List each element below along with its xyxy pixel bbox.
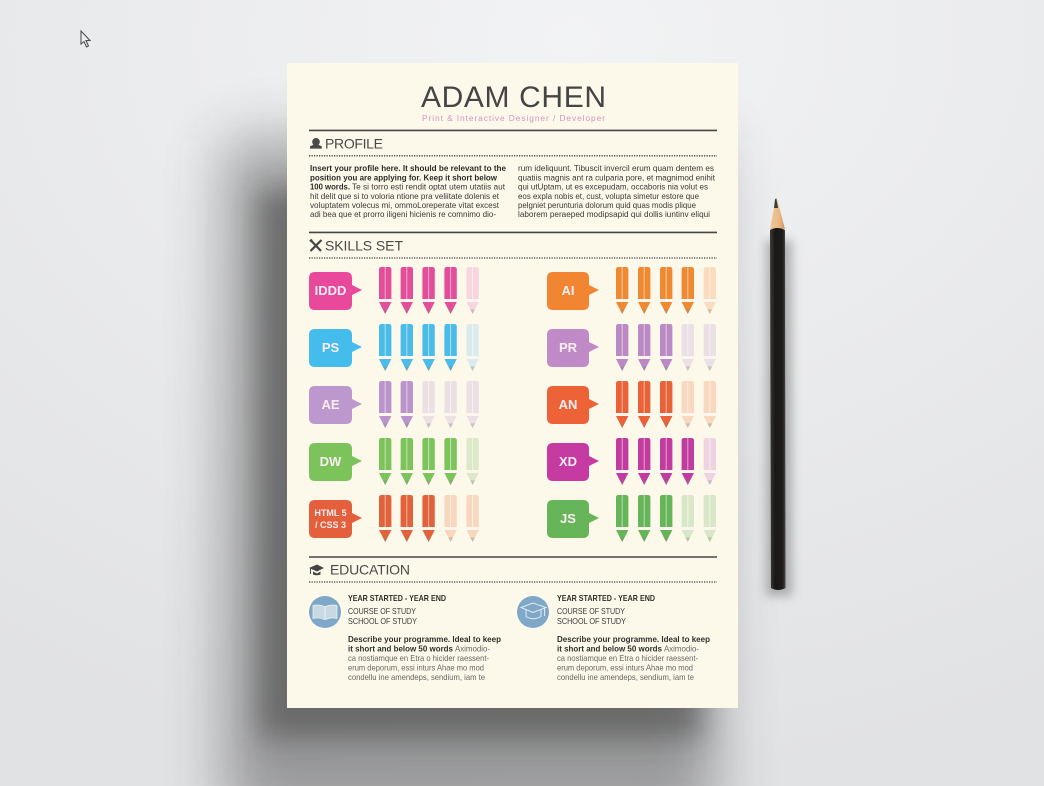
- education entry 1: condellu ine amendeps, sendium, iam te: [348, 672, 485, 682]
- subtitle: Print & Interactive Designer / Developer: [422, 113, 605, 123]
- skill: XD: [547, 438, 716, 485]
- education entry 2: erum deporum, essi inturs Ahae mo mod: [557, 662, 693, 672]
- heading: profile: PROFILE: [325, 136, 383, 152]
- heading: education: EDUCATION: [330, 562, 410, 578]
- skill: IDDD: [309, 267, 479, 314]
- education entry 1: erum deporum, essi inturs Ahae mo mod: [348, 662, 484, 672]
- skill: HTML5 / CSS3: / CSS 3: [315, 520, 346, 530]
- education entry 2: [517, 593, 710, 682]
- section rules: [309, 130, 717, 582]
- cursor icon: [81, 31, 90, 47]
- profile text: 100 words.: [310, 182, 350, 192]
- skill: DW: [309, 438, 479, 485]
- heading: skills set: SKILLS SET: [325, 238, 403, 254]
- education entry 1: Describe your programme. Ideal to keep: [348, 634, 501, 644]
- pencil: [766, 198, 792, 596]
- skill: AE: AE: [321, 397, 340, 412]
- profile text: Insert your profile here. It should be relevant to the: [310, 163, 506, 173]
- education entry 1: YEAR STARTED - YEAR END: [348, 593, 446, 603]
- skill: AN: AN: [559, 397, 577, 412]
- education entry 1: ca nostiamque en Etra o hicider raessent-: [348, 653, 489, 663]
- skill: JS: [547, 495, 716, 542]
- education entry 2: COURSE OF STUDY: [557, 606, 625, 616]
- icon: open book: [309, 596, 341, 628]
- paper shadow: [225, 140, 715, 786]
- icon: person: [310, 138, 322, 149]
- education entry 1: COURSE OF STUDY: [348, 606, 416, 616]
- skill: PR: [547, 324, 716, 371]
- education entry 2: ca nostiamque en Etra o hicider raessent-: [557, 653, 698, 663]
- profile text: rum ideliquunt. Tibuscit invercil erum quam dentem es: [518, 163, 714, 173]
- skill: IDDD: IDDD: [315, 283, 346, 298]
- skill: AE: [309, 381, 479, 428]
- education entry 1: SCHOOL OF STUDY: [348, 616, 417, 626]
- education entry 2: Aximodio-: [664, 643, 699, 653]
- education entry 2: it short and below 50 words: [557, 643, 662, 653]
- education entry 1: [309, 593, 501, 682]
- profile text: quatiis magnis ant ra culparia pore, et magnimod enihit: [518, 172, 716, 182]
- name title: ADAM CHEN: [421, 81, 606, 114]
- education entry 2: YEAR STARTED - YEAR END: [557, 593, 655, 603]
- skill: AI: AI: [562, 283, 574, 298]
- skill: PS: [309, 324, 479, 371]
- skill: DW: DW: [320, 454, 342, 469]
- profile text: eos expla nobis et, cust, volupta simetur estore que: [518, 191, 699, 201]
- profile text: voluptatem volecus mi, ommoLoreperate vitat excest: [310, 200, 500, 210]
- skill: AN: [547, 381, 716, 428]
- profile text: laborem peraeped modipsapid qui dollis iuntinv eliqui: [518, 209, 710, 219]
- profile text: [310, 163, 716, 219]
- education entry 2: condellu ine amendeps, sendium, iam te: [557, 672, 694, 682]
- skill: AI: [547, 267, 716, 314]
- education entry 2: SCHOOL OF STUDY: [557, 616, 626, 626]
- resume page: [287, 63, 738, 708]
- skill: HTML5 / CSS3: HTML 5: [314, 508, 347, 518]
- profile text: hit delit que si to voloria ntione pra veliitate dolenis et: [310, 191, 500, 201]
- skill: XD: XD: [559, 454, 577, 469]
- education entry 1: Aximodio-: [455, 643, 490, 653]
- icon: mortarboard: [309, 564, 324, 575]
- education entry 2: Describe your programme. Ideal to keep: [557, 634, 710, 644]
- icon: graduation cap: [517, 596, 549, 628]
- profile text: adi bea que et prorro iligeni hicienis re comnimo dio-: [310, 209, 496, 219]
- skill: JS: JS: [560, 511, 576, 526]
- profile text: position you are applying for. Keep it short below: [310, 172, 497, 182]
- icon: tools: [310, 240, 322, 251]
- profile text: qui utUptam, ut es excepudam, occaboris nia volut es: [518, 182, 708, 192]
- profile text: Te si torro esti rendit optat utem utatiis aut: [352, 182, 506, 192]
- pencil shadow: [766, 240, 792, 596]
- skill: PS: PS: [322, 340, 339, 355]
- profile text: pelgniet perunturia dolorum quid quas modis plique: [518, 200, 696, 210]
- skill: PR: PR: [559, 340, 578, 355]
- skill: HTML5 / CSS3: [309, 495, 479, 542]
- education entry 1: it short and below 50 words: [348, 643, 453, 653]
